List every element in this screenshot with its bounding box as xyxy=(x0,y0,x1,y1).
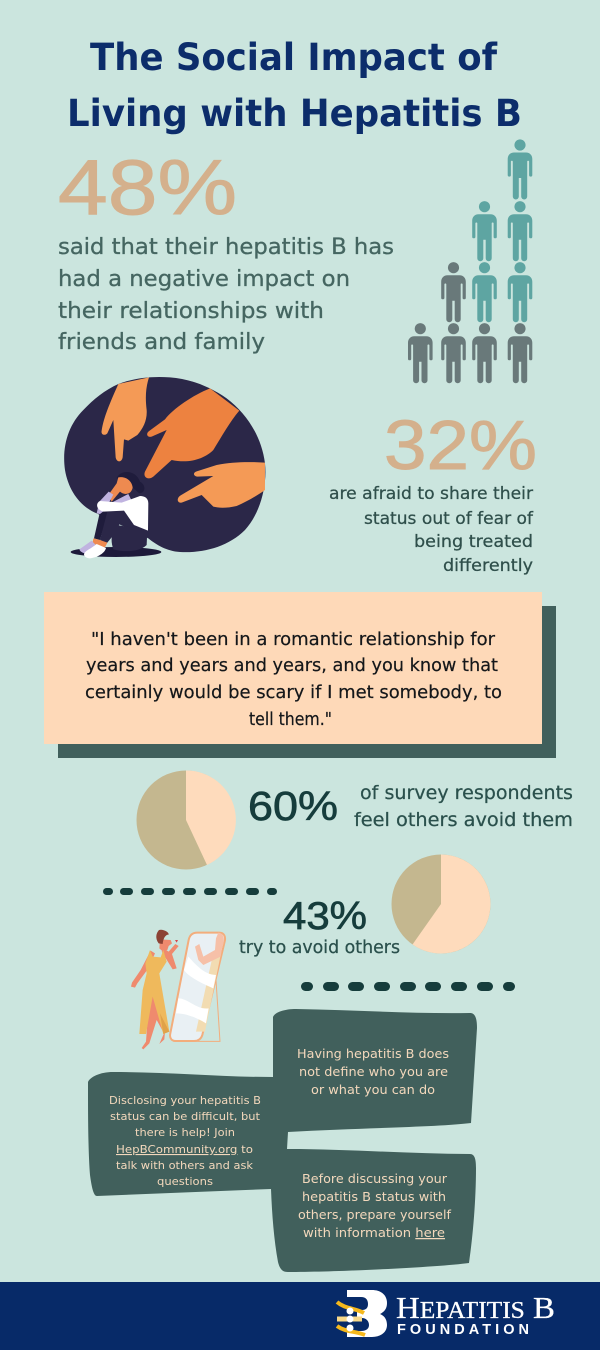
title: The Social Impact of xyxy=(90,36,498,79)
text: 32 percent description xyxy=(329,484,534,576)
text: 32 percent description: status out of fear of xyxy=(364,509,534,529)
callout text: prepare yourself: Before discussing your xyxy=(302,1171,448,1186)
pie chart: 60 percent xyxy=(136,770,236,870)
quote text: years and years and years, and you know that xyxy=(86,656,498,676)
callout text: disclosing status: Disclosing your hepatitis B xyxy=(109,1094,261,1107)
text: 32 percent description: differently xyxy=(443,556,533,576)
illustration: woman and mirror xyxy=(131,930,225,1049)
stat: 32 percent: 32% xyxy=(384,406,537,484)
text: 48 percent description: said that their hepatitis B has xyxy=(58,234,394,260)
text: 48 percent description: had a negative impact on xyxy=(58,266,350,292)
stat: 60 percent: 60% xyxy=(248,783,338,829)
text: feel others avoid them: of survey respondents xyxy=(360,782,573,804)
text: 48 percent description: friends and family xyxy=(58,329,265,355)
text: 32 percent description: are afraid to share their xyxy=(329,484,533,504)
logo mark xyxy=(337,1290,387,1337)
illustration: hands pointing at seated woman xyxy=(64,377,265,558)
callout text: disclosing status: HepBCommunity.org to xyxy=(116,1143,253,1156)
logo wordmark: HEPATITIS B xyxy=(396,1290,555,1325)
quote text: tell them." xyxy=(249,710,332,730)
text: feel others avoid them: feel others avoid them xyxy=(354,809,573,831)
callout text: prepare yourself: hepatitis B status with xyxy=(302,1189,446,1204)
text: 32 percent description: being treated xyxy=(414,532,533,552)
quote text: certainly would be scary if I met somebody, to xyxy=(85,683,502,703)
callout text: prepare yourself: with information here xyxy=(303,1225,445,1240)
callout text: disclosing status xyxy=(109,1094,261,1188)
callout text: does not define you xyxy=(297,1046,449,1097)
text: try to avoid others: try to avoid others xyxy=(239,938,400,958)
pie chart: 43 percent xyxy=(392,854,490,954)
callout text: does not define you: not define who you are xyxy=(299,1064,448,1079)
callout text: prepare yourself: others, prepare yourself xyxy=(298,1207,452,1222)
callout text: disclosing status: questions xyxy=(157,1175,213,1188)
quote text: "I haven't been in a romantic relationship for xyxy=(91,630,496,650)
callout text: prepare yourself xyxy=(298,1171,452,1240)
callout text: does not define you: or what you can do xyxy=(311,1082,435,1097)
text: feel others avoid them xyxy=(354,782,573,831)
text: 48 percent description xyxy=(58,234,394,355)
stat: 48 percent: 48% xyxy=(58,143,237,231)
quote text xyxy=(85,630,502,730)
quote panel xyxy=(44,592,556,758)
callout text: disclosing status: talk with others and ask xyxy=(116,1159,254,1172)
callout text: disclosing status: there is help! Join xyxy=(135,1126,235,1139)
footer band xyxy=(0,1282,600,1350)
callouts: advice panels xyxy=(88,1009,477,1272)
pictogram: people xyxy=(408,139,532,383)
callout text: does not define you: Having hepatitis B does xyxy=(297,1046,449,1061)
title xyxy=(67,36,522,135)
title: Living with Hepatitis B xyxy=(67,92,522,135)
callout text: disclosing status: status can be difficult, but xyxy=(110,1110,261,1123)
text: 48 percent description: their relationships with xyxy=(58,298,324,324)
logo wordmark: FOUNDATION xyxy=(397,1322,529,1338)
stat: 43 percent: 43% xyxy=(283,895,367,938)
